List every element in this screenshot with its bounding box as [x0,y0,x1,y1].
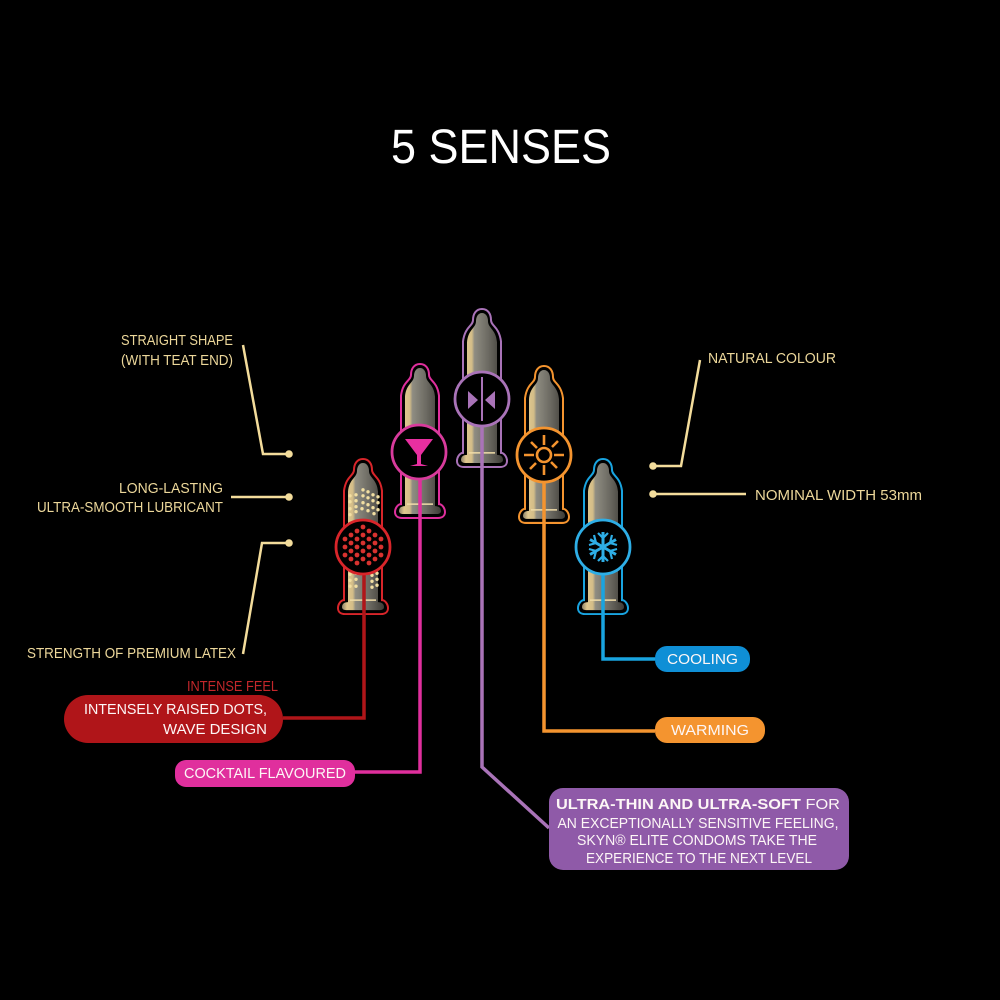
connector: blue [603,574,655,659]
connector: orange [544,481,655,731]
icon: cooling snowflake [576,520,630,574]
condom: red with raised dots [338,459,388,614]
label: straight shape: (WITH TEAT END) [121,353,233,369]
title: 5 SENSES [391,121,611,174]
leader: lubricant [231,493,293,501]
connector: purple [482,425,549,828]
leader: latex [243,539,293,654]
leader: straight shape [243,345,293,458]
heading: intense feel: INTENSE FEEL [187,679,278,695]
condom: blue [578,459,628,614]
right feature callouts [649,351,922,504]
label: straight shape: STRAIGHT SHAPE [121,333,233,349]
box: ultra-thin description: AN EXCEPTIONALLY SENSITIVE FEELING, [558,815,838,832]
label: lubricant: ULTRA-SMOOTH LUBRICANT [37,500,223,516]
condom: pink [395,364,445,518]
leader: nominal width [649,490,746,498]
pill: intensely raised dots: INTENSELY RAISED DOTS, [84,701,267,718]
label: natural colour: NATURAL COLOUR [708,351,836,367]
icon: cocktail [392,425,446,479]
pill: cocktail flavoured [175,760,355,787]
left feature callouts [27,333,293,662]
label: lubricant: LONG-LASTING [119,481,223,497]
condom: purple [457,309,507,467]
pill: intensely raised dots [64,695,283,743]
label: latex: STRENGTH OF PREMIUM LATEX [27,646,236,662]
pill: cooling [655,646,750,672]
icon: warming sun [517,428,571,482]
pill: warming: WARMING [671,722,749,739]
label: lubricant [37,481,223,516]
label: straight shape [121,333,233,369]
pill: cocktail flavoured: COCKTAIL FLAVOURED [184,765,346,782]
condom: orange [519,366,569,523]
label: nominal width: NOMINAL WIDTH 53mm [755,488,922,504]
pill: cooling: COOLING [667,651,738,668]
pill: intensely raised dots: WAVE DESIGN [163,721,267,738]
box: ultra-thin description: SKYN® ELITE CONDOMS TAKE THE [577,832,817,849]
box: ultra-thin description: EXPERIENCE TO THE NEXT LEVEL [586,850,812,867]
pill: warming [655,717,765,743]
connector: red [283,574,364,718]
box: ultra-thin description [549,788,849,870]
icon: ultra-thin [455,372,509,426]
connector: pink [355,478,420,772]
icon: raised dots [336,520,390,574]
box: ultra-thin description: ULTRA-THIN AND ULTRA-SOFT FOR [556,796,840,813]
leader: natural colour [649,360,700,470]
